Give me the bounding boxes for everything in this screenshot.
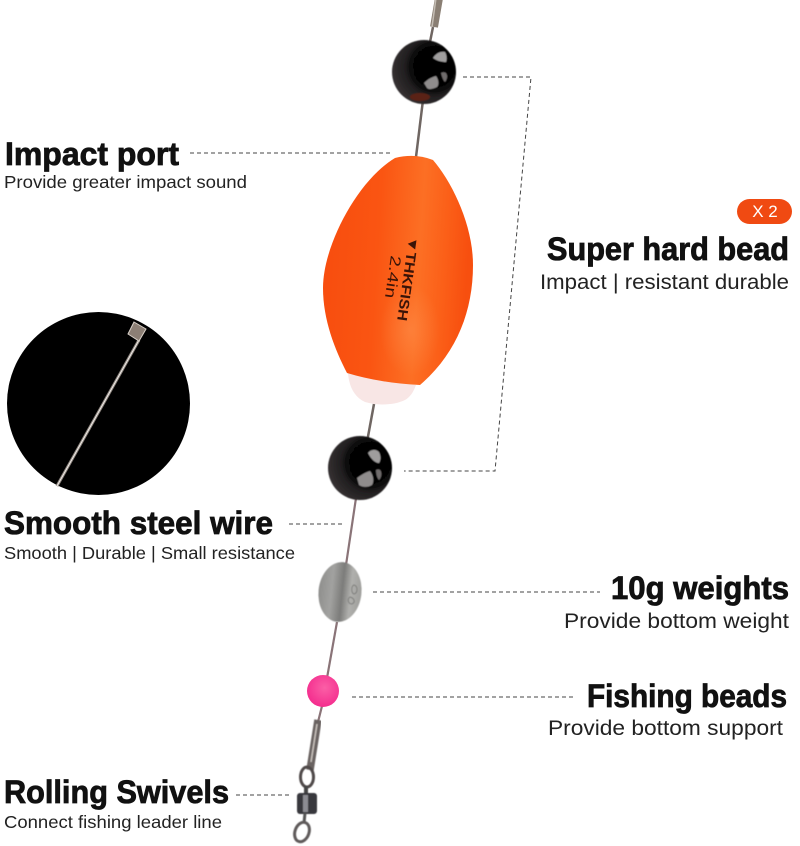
leader: rolling swivels (236, 794, 292, 796)
leader: fishing beads (352, 696, 575, 698)
rolling swivel (292, 720, 318, 844)
leader: super hard bead (404, 77, 531, 471)
float size text: 2.4in (381, 254, 404, 299)
label: fishing beads: Provide bottom support (548, 717, 783, 740)
inset: steel wire close-up (7, 312, 190, 495)
label: rolling swivels (4, 774, 229, 832)
label: impact port: Provide greater impact sound (4, 172, 247, 192)
label: super hard bead (540, 231, 789, 294)
leader: impact port (190, 152, 393, 154)
white end cap (348, 373, 416, 404)
label: super hard bead: Impact | resistant durable (540, 271, 789, 294)
label: fishing beads (548, 678, 787, 740)
upper black bead (392, 40, 456, 104)
orange float (323, 156, 473, 404)
label: rolling swivels: Rolling Swivels (4, 774, 229, 810)
lead sinker weight (315, 560, 365, 624)
label: 10g weights (564, 570, 789, 633)
float logo text: ▼THKFISH (394, 236, 422, 322)
label: fishing beads: Fishing beads (587, 678, 787, 714)
label: impact port: Impact port (5, 136, 179, 172)
badge: x 2: X 2 (752, 202, 778, 221)
steel wire and top clip (318, 0, 439, 722)
label: 10g weights: 10g weights (611, 570, 789, 606)
leader: 10g weights (373, 591, 600, 593)
label: 10g weights: Provide bottom weight (564, 610, 789, 633)
label: smooth steel wire (4, 505, 295, 563)
leader: smooth steel wire (289, 523, 345, 525)
label: impact port (4, 136, 247, 192)
label: super hard bead: Super hard bead (547, 231, 789, 267)
label: rolling swivels: Connect fishing leader line (4, 812, 222, 832)
pink fishing bead (307, 675, 339, 707)
label: smooth steel wire: Smooth steel wire (4, 505, 273, 541)
label: smooth steel wire: Smooth | Durable | Small resistance (4, 543, 295, 563)
badge: x 2 (737, 199, 792, 224)
lower black bead (328, 436, 392, 500)
